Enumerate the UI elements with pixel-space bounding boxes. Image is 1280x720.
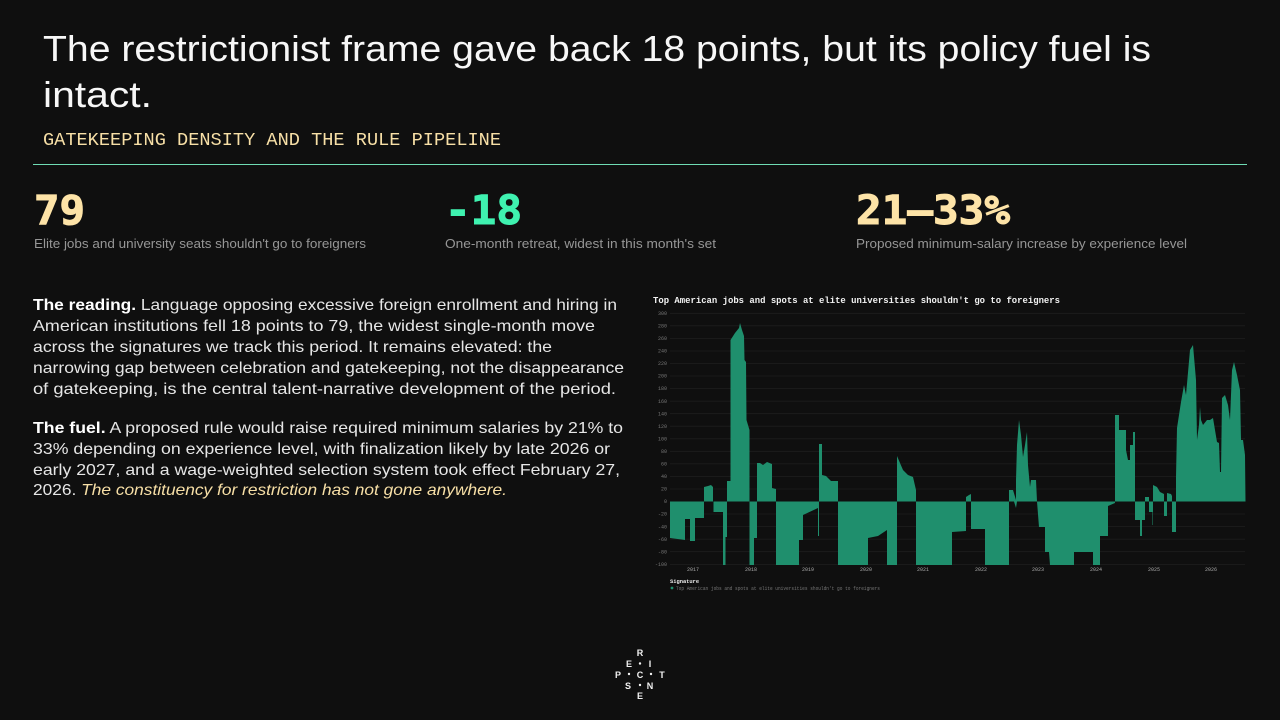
logo: wordmark — [615, 648, 665, 701]
logo: wordmark: C — [637, 670, 644, 680]
x axis labels: 2017 — [687, 567, 699, 573]
legend — [670, 579, 880, 592]
stat: 79 — [34, 188, 366, 251]
chart: signature area chart — [653, 296, 1246, 592]
stat: 79: 79 — [34, 188, 85, 234]
x axis labels: 2020 — [860, 567, 872, 573]
text block: the reading: American institutions fell 18 points to 79, the widest single-month move — [33, 318, 595, 335]
y axis labels: 220 — [658, 361, 667, 367]
logo: wordmark: E — [626, 659, 632, 669]
y axis labels: 160 — [658, 399, 667, 405]
x axis labels — [687, 567, 1217, 573]
y axis labels: 60 — [661, 462, 667, 468]
x axis labels: 2018 — [745, 567, 757, 573]
text block: the fuel: 2026. The constituency for restriction has not gone anywhere. — [33, 482, 507, 499]
logo: wordmark: I — [649, 659, 651, 669]
y axis labels: 280 — [658, 324, 667, 330]
stat: 21–33%: 21–33% — [856, 188, 1010, 234]
y axis labels: 20 — [661, 487, 667, 493]
legend: Signature — [670, 579, 699, 585]
text block: the fuel: 33% depending on experience level, with finalization likely by late 2026 or — [33, 441, 611, 458]
text block: the reading — [33, 297, 624, 398]
y axis labels: -20 — [658, 512, 667, 518]
stat: 21–33% — [856, 188, 1187, 251]
text block: the fuel: The fuel. A proposed rule would raise required minimum salaries by 21% to — [33, 420, 623, 437]
y axis labels: -100 — [655, 562, 667, 568]
title — [43, 28, 1151, 115]
title: The restrictionist frame gave back 18 points, but its policy fuel is — [43, 28, 1151, 69]
negative area — [670, 502, 1176, 565]
x axis labels: 2022 — [975, 567, 987, 573]
stat: -18: One-month retreat, widest in this month's set — [445, 237, 717, 251]
subtitle: GATEKEEPING DENSITY AND THE RULE PIPELINE — [43, 130, 501, 151]
y axis labels: 240 — [658, 349, 667, 355]
y axis labels: -40 — [658, 524, 667, 530]
y axis labels: 100 — [658, 436, 667, 442]
text block: the fuel — [33, 420, 623, 499]
text block: the reading: across the signatures we track this period. It remains elevated: the — [33, 339, 552, 356]
text block: the fuel: early 2027, and a wage-weighted selection system took effect February 27, — [33, 462, 620, 479]
y axis labels — [655, 311, 667, 568]
y axis labels: -80 — [658, 549, 667, 555]
x axis labels: 2025 — [1148, 567, 1160, 573]
text block: the reading: of gatekeeping, is the central talent-narrative development of the period. — [33, 381, 616, 398]
text block: the reading: narrowing gap between celebration and gatekeeping, not the disappearance — [33, 360, 624, 377]
stat: -18: -18 — [445, 188, 522, 234]
logo: wordmark: E — [637, 691, 643, 701]
legend: Top American jobs and spots at elite universities shouldn't go to foreigners — [676, 586, 880, 592]
logo: wordmark: T — [659, 670, 665, 680]
logo: wordmark: S — [625, 681, 631, 691]
y axis labels: 180 — [658, 386, 667, 392]
y axis labels: -60 — [658, 537, 667, 543]
y axis labels: 40 — [661, 474, 667, 480]
x axis labels: 2021 — [917, 567, 929, 573]
y axis labels: 120 — [658, 424, 667, 430]
stat: -18 — [445, 188, 717, 251]
logo: wordmark: R — [637, 648, 644, 658]
stat: 79: Elite jobs and university seats shouldn't go to foreigners — [34, 237, 366, 251]
y axis labels: 260 — [658, 336, 667, 342]
chart title: Top American jobs and spots at elite universities shouldn't go to foreigners — [653, 296, 1060, 306]
y axis labels: 80 — [661, 449, 667, 455]
text block: the reading: The reading. Language opposing excessive foreign enrollment and hiring in — [33, 297, 617, 314]
x axis labels: 2024 — [1090, 567, 1102, 573]
y axis labels: 300 — [658, 311, 667, 317]
positive area — [704, 323, 1246, 502]
logo: wordmark: N — [647, 681, 653, 691]
logo: wordmark: P — [615, 670, 621, 680]
stat: 21–33%: Proposed minimum-salary increase by experience level — [856, 237, 1187, 251]
x axis labels: 2026 — [1205, 567, 1217, 573]
y axis labels: 140 — [658, 411, 667, 417]
x axis labels: 2023 — [1032, 567, 1044, 573]
y axis labels: 200 — [658, 374, 667, 380]
y axis labels: 0 — [664, 499, 667, 505]
x axis labels: 2019 — [802, 567, 814, 573]
title: intact. — [43, 74, 152, 115]
